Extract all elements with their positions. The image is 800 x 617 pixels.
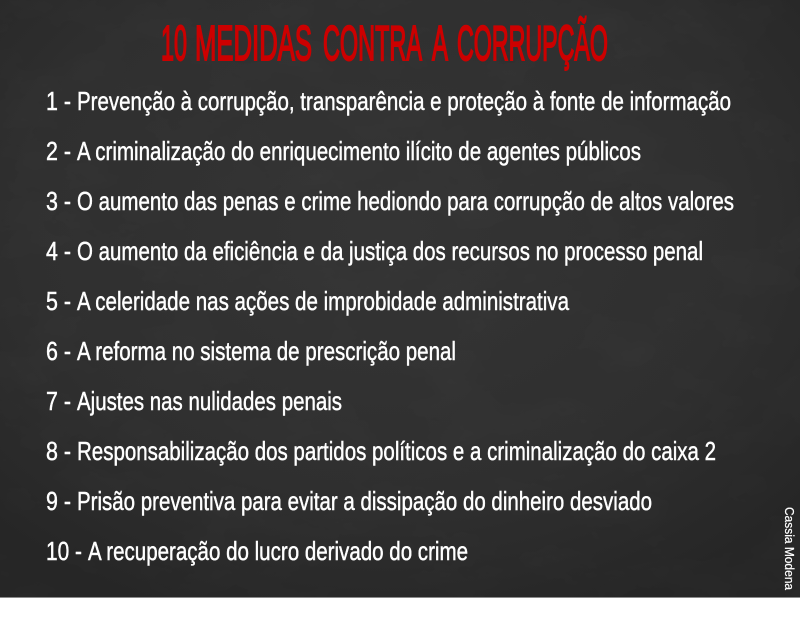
measure 10: 10 - — [46, 536, 82, 566]
title — [161, 17, 608, 71]
measure 7: 7 - — [46, 386, 71, 416]
measure 5: 5 - — [46, 286, 71, 316]
measure 9: 9 - — [46, 486, 71, 516]
measure 2: A criminalização do enriquecimento ilícito de agentes públicos — [77, 136, 641, 166]
measure 1: 1 - — [46, 86, 71, 116]
measure 9: Prisão preventiva para evitar a dissipação do dinheiro desviado — [77, 486, 652, 516]
title: CONTRA — [323, 17, 422, 71]
title: A — [432, 17, 448, 71]
measure 10: A recuperação do lucro derivado do crime — [88, 536, 468, 566]
measure 5: A celeridade nas ações de improbidade administrativa — [77, 286, 569, 316]
text: CORRUPÇÃO — [457, 17, 608, 71]
measure 7: Ajustes nas nulidades penais — [77, 386, 342, 416]
measure 8: 8 - — [46, 436, 71, 466]
measure 3: 3 - — [46, 186, 71, 216]
credit: Cassia Modena — [782, 507, 796, 590]
measure 6: A reforma no sistema de prescrição penal — [77, 336, 456, 366]
measure 6: 6 - — [46, 336, 71, 366]
title: MEDIDAS — [195, 17, 312, 71]
measure 2: 2 - — [46, 136, 71, 166]
list of ten measures — [46, 86, 734, 566]
measure 4: 4 - — [46, 236, 71, 266]
title: 10 — [161, 17, 187, 71]
